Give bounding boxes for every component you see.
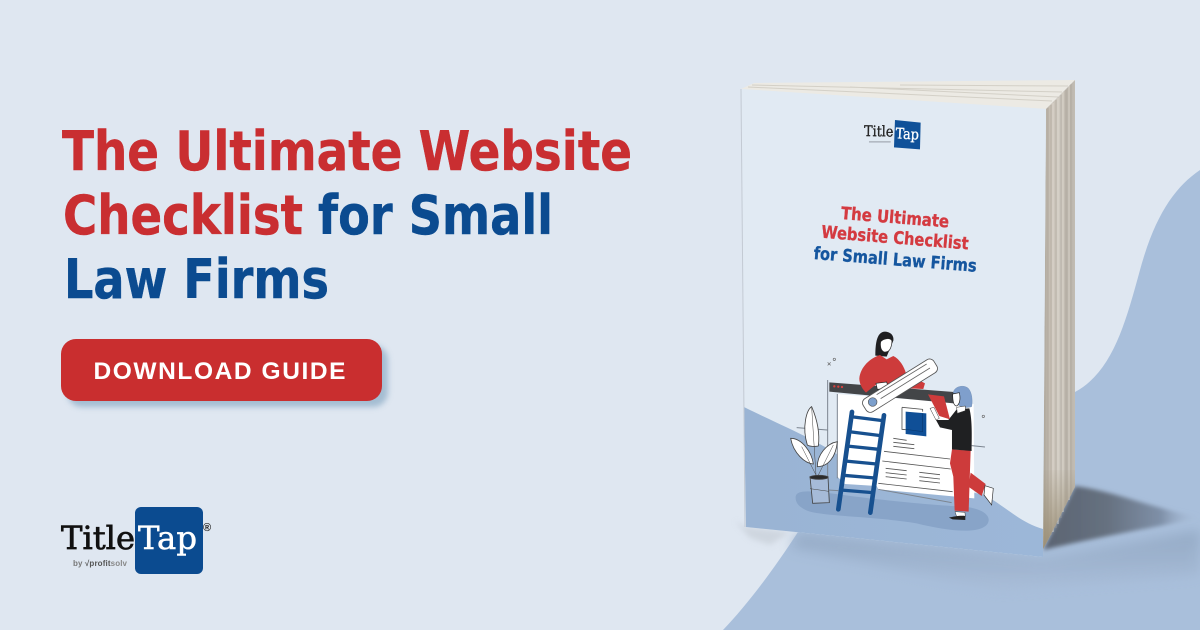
- slider bar: [861, 357, 939, 414]
- plant: [791, 407, 837, 503]
- cover wave: [744, 407, 1043, 557]
- TitleTap logo: ®: [203, 522, 211, 534]
- download button: DOWNLOAD GUIDE: [94, 358, 346, 385]
- headline: for Small: [318, 184, 553, 247]
- book top page edge: [741, 80, 1075, 109]
- cover title: for Small Law Firms: [813, 244, 977, 277]
- cover title: The Ultimate: [840, 204, 950, 232]
- ground ellipse: [796, 491, 989, 531]
- book cover: [741, 89, 1046, 557]
- headline: The Ultimate Website: [62, 120, 632, 183]
- cover illustration: [791, 332, 993, 531]
- book ground shadows: [735, 486, 1200, 590]
- cover logo: [864, 120, 921, 149]
- decorative sparks: [828, 358, 984, 417]
- cover title: [813, 204, 977, 277]
- background blob: [723, 170, 1200, 630]
- book: [741, 80, 1075, 557]
- woman with tablet: [928, 386, 993, 520]
- cover logo: Tap: [895, 125, 919, 144]
- TitleTap logo: by √profitsolv: [73, 559, 128, 568]
- cover logo: Title: [864, 123, 894, 141]
- cover left edge: [741, 89, 745, 527]
- book right page block: [1043, 80, 1075, 549]
- headline: Law Firms: [64, 248, 329, 311]
- cover title: Website Checklist: [821, 223, 969, 254]
- ladder: [838, 412, 884, 513]
- woman in red sweater: [859, 332, 925, 393]
- headline: Checklist: [63, 184, 303, 247]
- headline: [62, 120, 632, 311]
- download button: [61, 339, 388, 407]
- browser window: [797, 380, 985, 503]
- TitleTap logo: [61, 507, 211, 574]
- TitleTap logo: Tap: [138, 519, 197, 557]
- TitleTap logo: Title: [61, 519, 135, 557]
